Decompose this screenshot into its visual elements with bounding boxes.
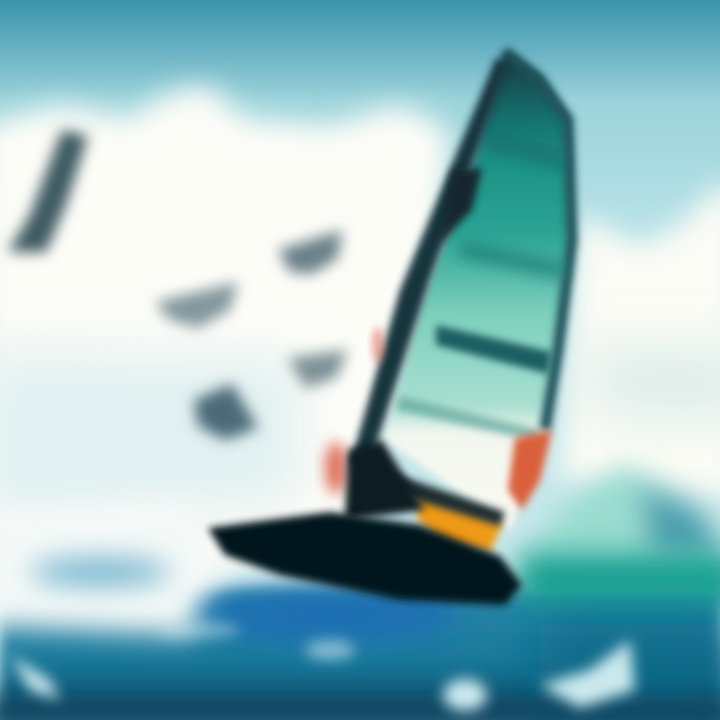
dark right water xyxy=(540,625,720,720)
teal water band xyxy=(520,555,720,605)
cloud shadows xyxy=(0,350,720,540)
boom grip xyxy=(438,168,482,245)
board xyxy=(208,512,522,605)
foam flecks xyxy=(10,622,635,711)
wave under board xyxy=(200,587,460,643)
sail xyxy=(385,50,572,530)
kite four xyxy=(194,384,258,440)
clouds xyxy=(0,85,720,600)
kite two xyxy=(155,282,238,328)
sail dark outline xyxy=(505,52,572,430)
sail batten dark xyxy=(436,325,552,374)
distant kite xyxy=(8,130,88,252)
kite three xyxy=(288,350,348,388)
sail batten top xyxy=(484,130,566,170)
water body xyxy=(0,590,720,720)
windsurfer rig xyxy=(208,50,572,605)
sea xyxy=(0,500,720,720)
kite one xyxy=(278,230,342,274)
mast xyxy=(350,58,510,470)
bottom dark water xyxy=(0,695,720,720)
iceberg wave xyxy=(520,465,720,600)
left foam xyxy=(0,500,225,635)
sail batten lower xyxy=(396,396,540,442)
mast base xyxy=(345,440,425,520)
sail batten upper xyxy=(458,240,566,280)
group of small kites xyxy=(155,230,348,440)
mast red glow xyxy=(325,442,347,494)
red sail patch xyxy=(508,430,552,510)
orange sail patch xyxy=(415,492,503,552)
mast red glow upper xyxy=(372,327,384,363)
blue wave on foam xyxy=(30,558,170,586)
sail foot xyxy=(390,474,505,526)
